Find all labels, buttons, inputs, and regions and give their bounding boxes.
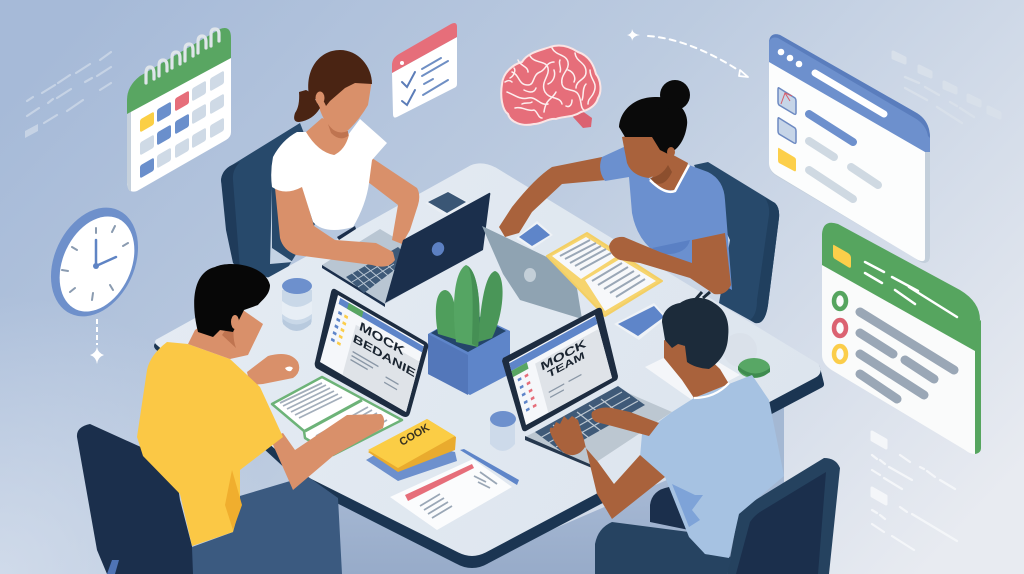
cup: right bbox=[490, 411, 516, 451]
icon: brain bbox=[501, 46, 600, 128]
table leg bbox=[770, 398, 784, 490]
open book: yellow edge bbox=[547, 233, 662, 316]
laptop base: top woman bbox=[322, 229, 446, 307]
icon: wall clock bbox=[34, 193, 155, 364]
laptop: MOCK TEAM: TEAM bbox=[547, 350, 586, 380]
icon: wall calendar bbox=[127, 28, 231, 192]
yellow notebook: COOK bbox=[397, 422, 432, 449]
person: top right woman bbox=[499, 80, 732, 294]
dashed arrow bbox=[627, 29, 748, 77]
floating window: green bbox=[822, 223, 981, 454]
exam paper bbox=[390, 459, 512, 530]
laptop lid: top woman bbox=[385, 193, 490, 303]
icon: checklist card bbox=[392, 23, 457, 118]
laptop screen: MOCK BEDANIE: BEDANIE bbox=[352, 332, 417, 380]
tablet: blue bbox=[614, 303, 667, 340]
person: top woman bbox=[270, 50, 419, 267]
person: light blue shirt bbox=[550, 292, 784, 574]
floating window: blue bbox=[769, 34, 930, 263]
small paper and green disk bbox=[645, 333, 770, 400]
chair: bottom left bbox=[77, 424, 302, 574]
laptop screen: MOCK BEDANIE: MOCK bbox=[358, 320, 406, 359]
small tablet bbox=[516, 221, 553, 249]
decorative data lines bottom right bbox=[872, 432, 957, 550]
chair: top right woman bbox=[694, 162, 779, 323]
laptop back: grey bbox=[482, 226, 582, 319]
phone bbox=[425, 191, 470, 217]
floor shadow bbox=[300, 400, 784, 574]
open book: green edge bbox=[272, 377, 402, 455]
laptop: MOCK TEAM bbox=[502, 308, 672, 468]
person: yellow shirt bbox=[137, 264, 384, 574]
laptop screen: MOCK BEDANIE bbox=[315, 289, 428, 417]
cup: left bbox=[282, 278, 312, 331]
blue strip notebook bbox=[460, 449, 519, 485]
plant bbox=[428, 265, 510, 395]
table bbox=[158, 166, 820, 564]
chair: top woman bbox=[221, 123, 330, 280]
chair: bottom right bbox=[727, 458, 840, 574]
decorative data lines top left bbox=[25, 52, 111, 138]
yellow notebook bbox=[366, 419, 457, 481]
decorative data lines top right bbox=[893, 52, 1000, 123]
laptop: MOCK TEAM: MOCK bbox=[539, 336, 588, 373]
